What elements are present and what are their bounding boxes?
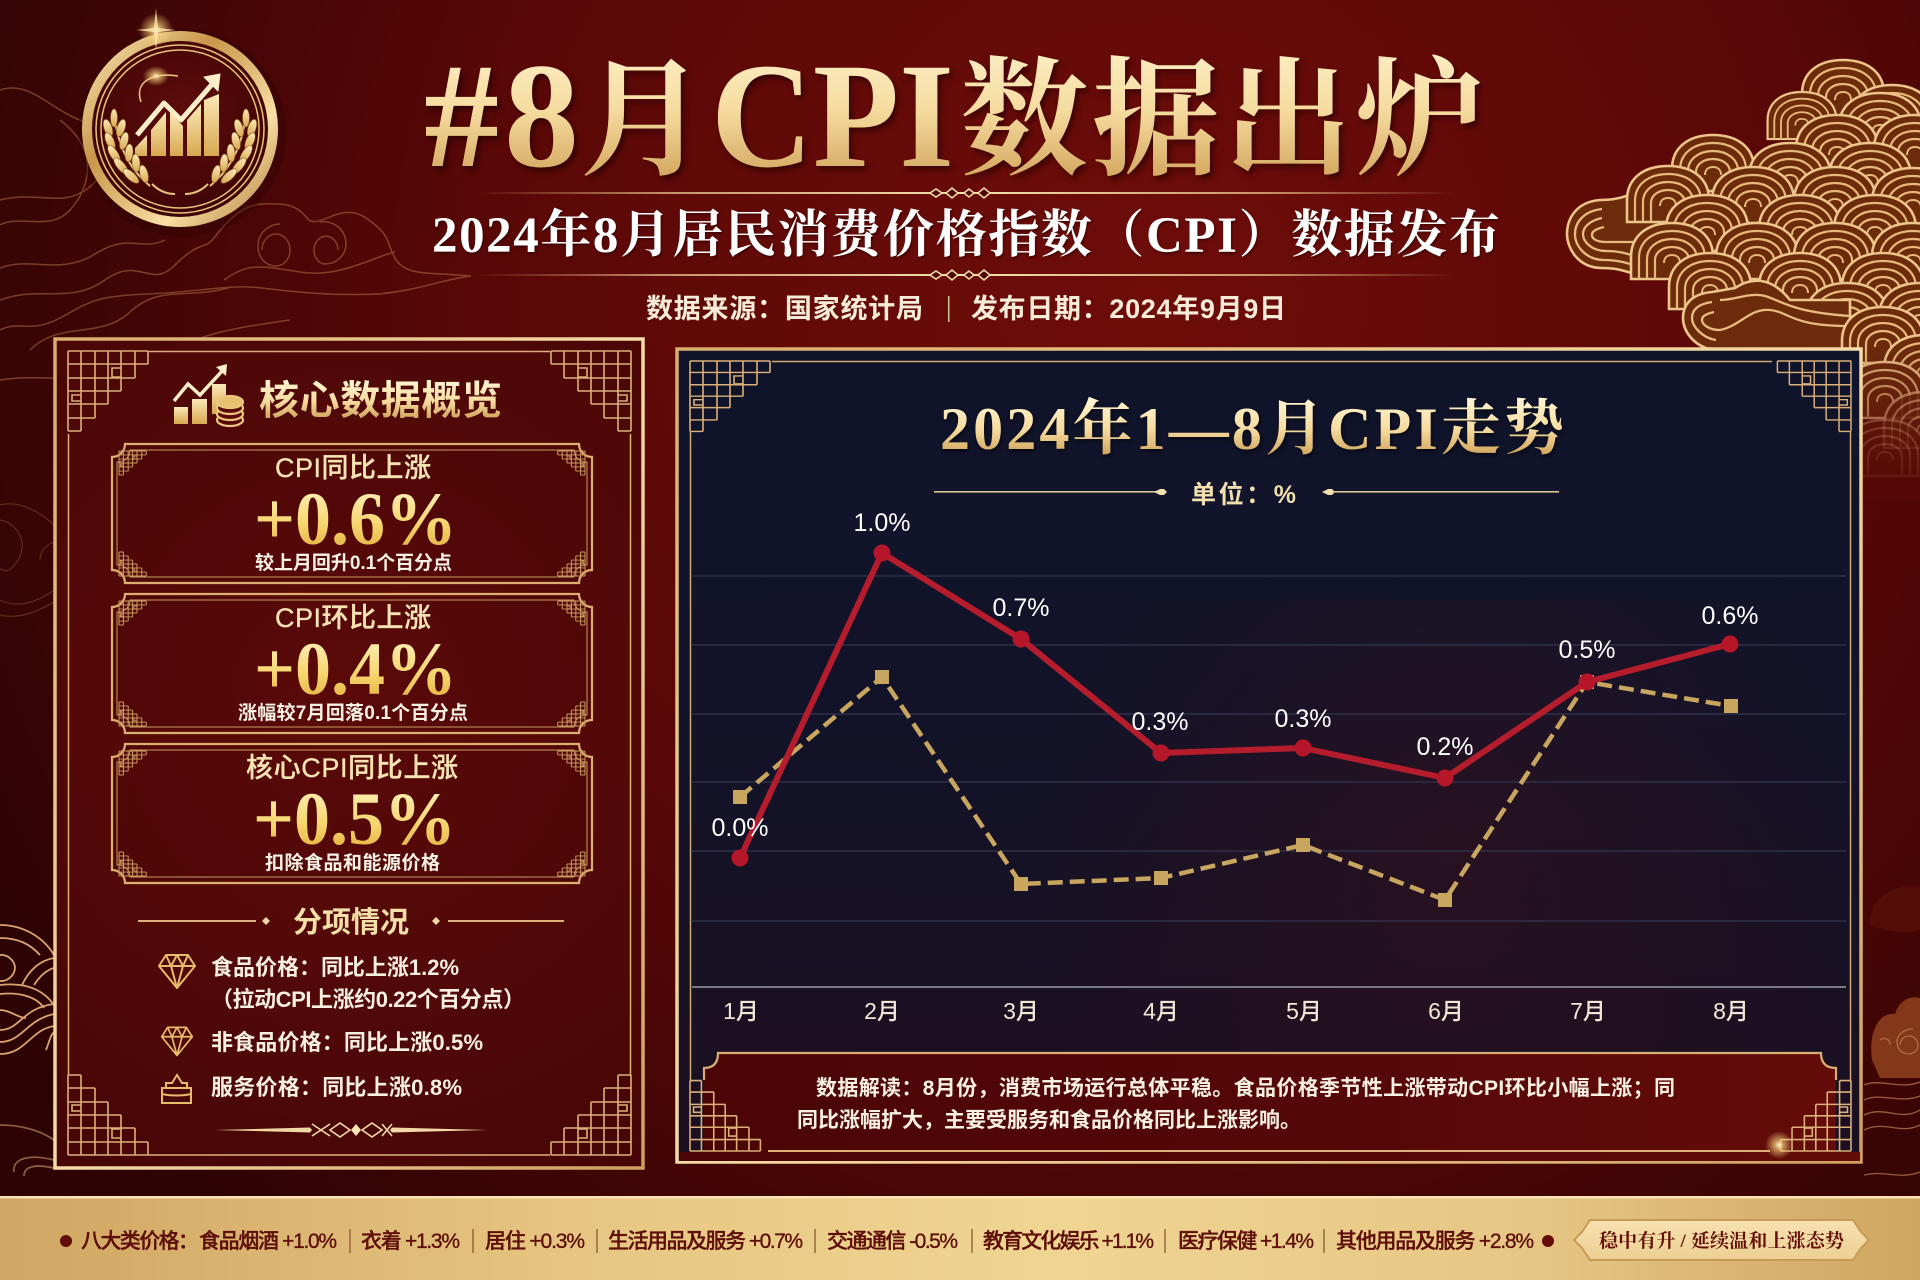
x axis months: 1月 <box>723 998 759 1024</box>
red series <box>732 544 1738 866</box>
x axis months: 7月 <box>1570 998 1606 1024</box>
footer text <box>81 1230 1534 1253</box>
card: core CPI: 核心CPI同比上涨 <box>246 753 458 783</box>
panel inner frame lines <box>68 352 630 1155</box>
panel: CPI trend chart <box>677 349 1861 1162</box>
footer text: 教育文化娱乐 +1.1% <box>983 1230 1154 1253</box>
footer text: 医疗保健 +1.4% <box>1178 1230 1314 1253</box>
cloud line art: mid left edge <box>0 504 54 616</box>
source line <box>646 294 1286 324</box>
card: CPI yoy: CPI同比上涨 <box>275 453 431 483</box>
unit label <box>934 480 1559 509</box>
data labels: 0.6% <box>1702 602 1758 630</box>
medallion arc highlight <box>139 75 178 102</box>
source line: 数据来源：国家统计局 <box>646 294 923 324</box>
footer text: 八大类价格： <box>81 1230 199 1253</box>
data labels: 0.5% <box>1559 636 1615 664</box>
cloud line art: upper left <box>0 88 471 392</box>
footer strip: eight categories <box>0 1196 1920 1280</box>
medallion arrow <box>137 74 220 135</box>
card: core CPI: 扣除食品和能源价格 <box>265 851 440 874</box>
title: #8 <box>424 33 579 199</box>
card: CPI mom: CPI环比上涨 <box>275 603 431 633</box>
chart corner lattices <box>690 361 1851 431</box>
card: CPI mom <box>112 594 592 733</box>
x axis months: 4月 <box>1143 998 1179 1024</box>
card: CPI yoy <box>112 444 592 583</box>
card: CPI yoy: +0.6% <box>254 478 457 561</box>
x axis months <box>723 998 1749 1024</box>
icon: bars and coins <box>174 364 243 426</box>
title: CPI <box>711 33 954 199</box>
section heading: breakdown: 分项情况 <box>293 906 409 939</box>
medallion sparkle <box>136 8 176 50</box>
section heading: breakdown <box>138 906 564 939</box>
badge: 稳中有升 / 延续温和上涨态势 <box>1599 1230 1844 1252</box>
title: 月 <box>579 17 707 201</box>
corner lattices <box>68 351 631 1155</box>
chart grid <box>692 576 1846 987</box>
title divider upper <box>475 188 1457 198</box>
footer text: 食品烟酒 +1.0% <box>199 1230 337 1253</box>
heading: 核心数据概览 <box>259 379 502 423</box>
data labels: 0.0% <box>712 814 768 842</box>
cloud lower pill <box>1683 281 1850 350</box>
medallion wheat left <box>101 109 150 186</box>
data labels: 0.7% <box>993 594 1049 622</box>
gold dashed series <box>733 670 1738 907</box>
footer separators <box>350 1229 1324 1253</box>
card: CPI yoy: 较上月回升0.1个百分点 <box>255 551 452 574</box>
fade: right edge of scallop cloud <box>1862 345 1920 500</box>
footer text: 其他用品及服务 +2.8% <box>1336 1230 1534 1253</box>
item: food prices: 食品价格：同比上涨1.2% <box>211 955 459 980</box>
item: food prices <box>159 955 525 1012</box>
panel: core data overview <box>55 339 643 1168</box>
x axis months: 6月 <box>1428 998 1464 1024</box>
item: non-food prices: 非食品价格：同比上涨0.5% <box>211 1030 483 1055</box>
footer text: 衣着 +1.3% <box>361 1230 460 1253</box>
cloud tail pill <box>1567 180 1720 278</box>
x axis months: 3月 <box>1003 998 1039 1024</box>
callout: data interpretation: 同比涨幅扩大，主要受服务和食品价格同比上涨影响。 <box>797 1108 1301 1132</box>
item: food prices: （拉动CPI上涨约0.22个百分点） <box>211 987 525 1012</box>
callout: data interpretation: 数据解读：8月份，消费市场运行总体平稳。食品价格季节性上涨带动CPI环比小幅上涨；同 <box>816 1076 1675 1100</box>
card: CPI mom: 涨幅较7月回落0.1个百分点 <box>238 701 468 724</box>
medallion logo <box>78 8 286 237</box>
callout: data interpretation <box>679 1053 1860 1161</box>
item: service prices: 服务价格：同比上涨0.8% <box>211 1075 462 1100</box>
medallion wreath base <box>152 184 208 194</box>
badge <box>1574 1220 1869 1260</box>
x axis months: 2月 <box>864 998 900 1024</box>
ornament divider <box>215 1123 487 1137</box>
title divider lower <box>475 270 1457 280</box>
subtitle: 2024年8月居民消费价格指数（CPI）数据发布 <box>432 207 1500 264</box>
x axis months: 8月 <box>1713 998 1749 1024</box>
cloud: lower right edge <box>1864 886 1920 1175</box>
data labels: 0.3% <box>1275 705 1331 733</box>
footer bullets <box>60 1235 1554 1247</box>
medallion bars <box>135 94 219 156</box>
x axis months: 5月 <box>1286 998 1322 1024</box>
cloud: large gold scallop cloud upper right <box>1567 60 1920 476</box>
unit label: 单位：% <box>1191 480 1296 509</box>
data labels: 0.2% <box>1417 733 1473 761</box>
footer text: 交通通信 -0.5% <box>827 1230 958 1253</box>
card: core CPI <box>112 744 592 883</box>
data labels: 0.3% <box>1132 708 1188 736</box>
title: 数据出炉 <box>960 17 1488 201</box>
data labels <box>712 509 1758 842</box>
card: core CPI: +0.5% <box>253 778 456 861</box>
chart title: 2024年1—8月CPI走势 <box>940 396 1564 462</box>
footer text: 居住 +0.3% <box>485 1230 585 1253</box>
medallion wheat right <box>210 109 259 186</box>
cloud line art: lower left edge <box>0 925 54 1176</box>
card: CPI mom: +0.4% <box>254 628 457 711</box>
source line: 发布日期：2024年9月9日 <box>971 294 1286 324</box>
data labels: 1.0% <box>854 509 910 537</box>
chart inner frame lines <box>690 362 1850 1082</box>
footer text: 生活用品及服务 +0.7% <box>608 1230 803 1253</box>
